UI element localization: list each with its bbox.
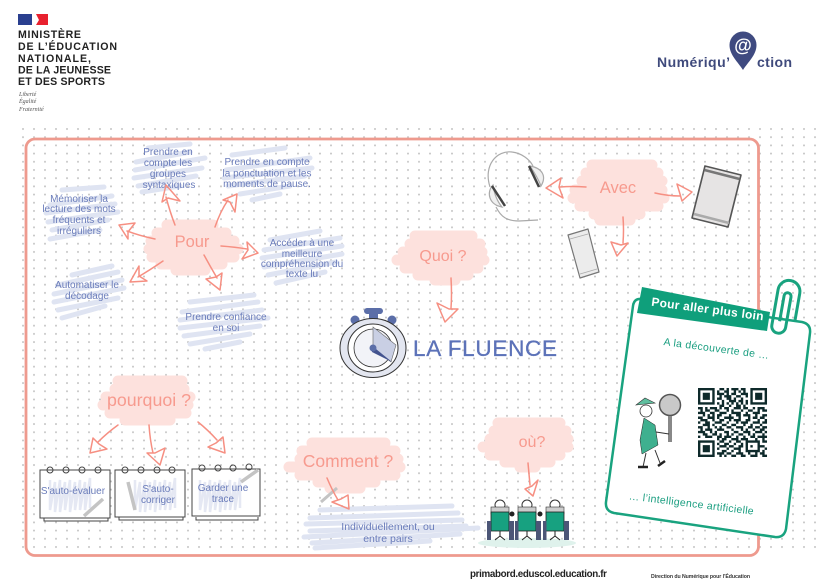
notebook: S'auto-évaluer: [40, 467, 110, 521]
note scribble: compréhension: [262, 231, 342, 283]
footer: direction: Direction du Numérique pour l’Éducation: [651, 572, 750, 580]
section: Avec: [488, 152, 741, 278]
arrows: Pour: [119, 185, 258, 290]
notebook: S'auto-évaluer: S'auto-évaluer: [41, 486, 106, 497]
note: individuellement: entre pairs: [363, 533, 413, 545]
blob: pourquoi: [103, 381, 190, 420]
note: mémoriser: lecture des mots: [42, 204, 116, 215]
section: pourquoi: [40, 381, 260, 521]
note: groupes syntaxiques: groupes: [150, 169, 186, 180]
arrows: pourquoi: [90, 422, 225, 465]
heading: où: où?: [519, 434, 545, 451]
heading: Comment: Comment ?: [303, 451, 393, 471]
heading: Avec: Avec: [600, 179, 636, 197]
note: ponctuation: Prendre en compte: [224, 157, 310, 168]
motto: Égalité: [18, 97, 37, 105]
heading: ministry name: ET DES SPORTS: [18, 76, 105, 88]
note scribble: syntaxiques: [134, 144, 205, 192]
notebook: S'auto-corriger: S'auto-: [142, 484, 174, 495]
footer: site url: primabord.eduscol.education.fr: [470, 569, 607, 580]
note: ponctuation: la ponctuation et les: [223, 168, 311, 180]
icon: phone: [568, 229, 599, 278]
note: accéder: compréhension du: [261, 259, 343, 270]
note: groupes syntaxiques: syntaxiques: [143, 180, 195, 191]
arrow: où: [525, 463, 538, 496]
note scribble: ponctuation: [224, 148, 312, 200]
note: décodage: Automatiser le: [55, 280, 119, 291]
heading: Pour: Pour: [175, 233, 210, 251]
section: Quoi: [397, 236, 484, 322]
note: confiance: en soi: [213, 323, 239, 334]
note: décodage: décodage: [65, 291, 109, 302]
logo: Numériqu'@ction: [657, 31, 792, 70]
notebook: S'auto-corriger: [115, 467, 185, 520]
arrows: Avec: [546, 178, 692, 256]
section: où: [478, 423, 576, 548]
blob: Avec: [573, 165, 664, 220]
note: mémoriser: fréquents et: [53, 215, 106, 226]
logo: Numériqu'@ction: ction: [757, 54, 792, 70]
note: confiance: Prendre confiance: [185, 312, 267, 323]
logo: Numériqu'@ction: Numériqu’: [657, 54, 730, 70]
heading: ministry name: MINISTÈRE: [18, 28, 81, 41]
heading: ministry name: DE LA JEUNESSE: [18, 64, 111, 76]
heading: Quoi: Quoi ?: [419, 248, 467, 265]
note: groupes syntaxiques: compte les: [144, 158, 192, 169]
panel: Pour aller plus loin: [606, 279, 810, 537]
motto: Liberté: [18, 92, 37, 98]
icon: tablet: [692, 166, 741, 227]
note scribble: confiance: [180, 295, 268, 349]
panel: main frame: [26, 139, 758, 556]
heading: ministry name: [18, 28, 117, 88]
notebook: Garder une trace: trace: [212, 494, 235, 505]
notebook: S'auto-corriger: corriger: [141, 495, 176, 506]
QR code: [698, 389, 767, 456]
logo: ministry flag: [18, 14, 48, 25]
note: mémoriser: Mémoriser la: [50, 194, 108, 205]
heading: ministry name: DE L’ÉDUCATION: [18, 40, 117, 53]
section: Comment: [289, 443, 478, 548]
note: accéder: meilleure: [282, 249, 323, 260]
note: ponctuation: moments de pause.: [223, 179, 311, 190]
header band: [637, 287, 770, 331]
icon: students at desks: [478, 500, 576, 548]
note: individuellement: Individuellement, ou: [341, 521, 435, 533]
paperclip: [771, 279, 802, 336]
blob: où: [483, 423, 568, 467]
header text: Pour aller plus loin: [651, 295, 764, 323]
blob: Quoi: [397, 236, 484, 280]
icon: pencil: [321, 488, 337, 502]
note scribble: individuellement: [304, 506, 478, 548]
blob: Comment: [289, 443, 400, 488]
arrow: Comment: [327, 478, 349, 509]
icon: stopwatch: [340, 308, 406, 378]
note scribble: décodage: [54, 266, 124, 318]
note: accéder: Accéder à une: [270, 238, 335, 249]
card outline: [606, 299, 810, 537]
section: Pour: [42, 144, 343, 349]
notebook: Garder une trace: Garder une: [198, 483, 249, 494]
title: La fluence: LA FLUENCE: [413, 336, 557, 361]
logo: Numériqu'@ction: @: [734, 36, 752, 56]
note: accéder: texte lu: [286, 269, 318, 280]
arrow: Quoi: [437, 278, 458, 322]
note: groupes syntaxiques: Prendre en: [143, 147, 193, 158]
blob: Pour: [149, 225, 238, 270]
icon: headset: [488, 152, 544, 221]
motto: [18, 92, 44, 113]
note: mémoriser: irréguliers: [57, 226, 101, 237]
illustration: detective with magnifier: [636, 394, 680, 467]
card closing text: … l’intelligence artificielle: [628, 490, 755, 518]
note scribble: mots fréquents: [46, 187, 118, 239]
card intro text: A la découverte de …: [663, 336, 770, 362]
motto: Fraternité: [18, 107, 44, 113]
heading: pourquoi: pourquoi ?: [107, 390, 191, 410]
heading: ministry name: NATIONALE,: [18, 53, 91, 65]
notebook: Garder une trace: [192, 464, 260, 520]
